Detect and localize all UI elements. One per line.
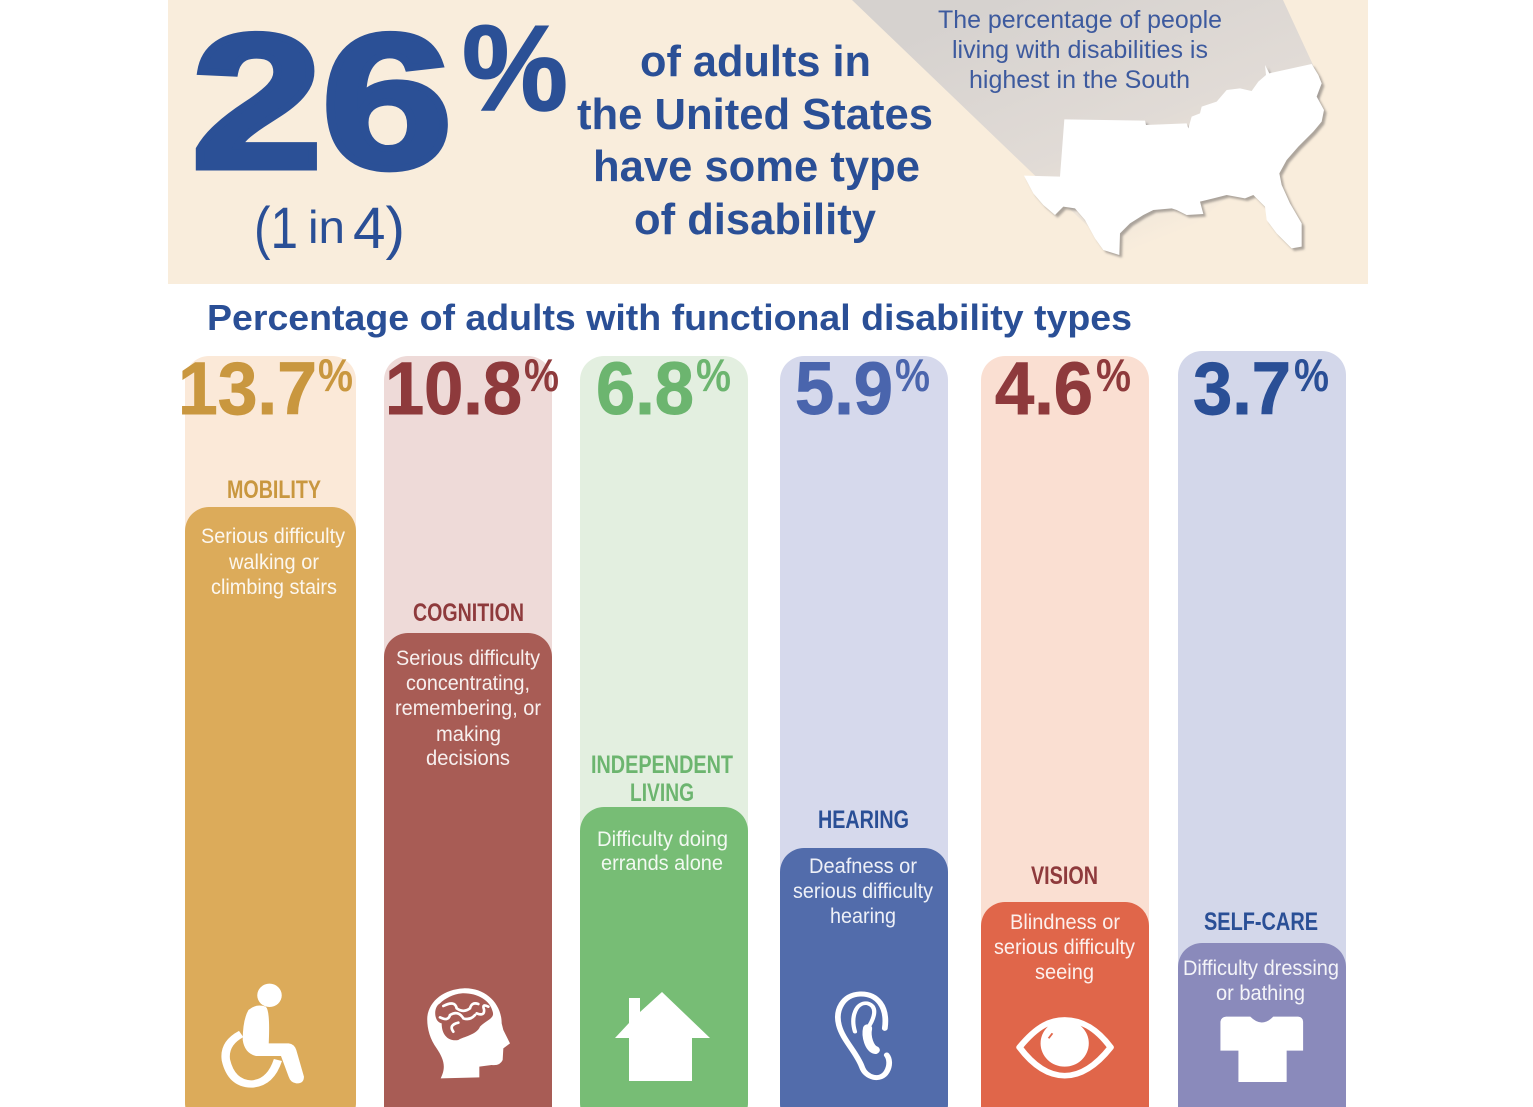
headline text: the United States xyxy=(577,90,933,139)
panel: hearing column xyxy=(780,347,948,1107)
hearing description: hearing xyxy=(830,904,896,928)
panel: headline banner xyxy=(168,0,1368,284)
1 in 4 note: in xyxy=(308,201,345,253)
section heading: Percentage of adults with functional disability types xyxy=(207,297,1132,338)
self-care description: Difficulty dressing xyxy=(1183,956,1339,980)
vision description: serious difficulty xyxy=(994,935,1135,959)
independent living description: Difficulty doing xyxy=(597,827,728,851)
mobility percentage: 13.7 xyxy=(178,347,317,430)
cognition label: COGNITION xyxy=(413,599,524,627)
headline text: of disability xyxy=(634,195,877,244)
independent living percentage: % xyxy=(696,349,731,401)
headline text xyxy=(577,37,933,244)
hearing label: HEARING xyxy=(818,806,909,834)
mobility description: walking or xyxy=(228,550,319,574)
hearing percentage: 5.9 xyxy=(795,347,893,430)
panel: independent living column xyxy=(580,347,748,1107)
vision description: seeing xyxy=(1035,960,1094,984)
mobility description: climbing stairs xyxy=(211,575,337,599)
cognition description: concentrating, xyxy=(406,671,530,695)
hearing percentage: % xyxy=(895,349,930,401)
mobility label: MOBILITY xyxy=(227,476,321,504)
vision label: VISION xyxy=(1031,862,1098,890)
big statistic 26%: % xyxy=(462,0,568,136)
independent living percentage: 6.8 xyxy=(596,347,694,430)
cognition percentage: % xyxy=(524,349,559,401)
icon: shirt xyxy=(1220,1017,1303,1082)
panel: mobility column xyxy=(178,347,356,1107)
big statistic 26%: 26 xyxy=(192,0,452,208)
independent living description: errands alone xyxy=(601,851,723,875)
map: southern United States xyxy=(1024,64,1327,258)
self-care percentage: 3.7 xyxy=(1193,347,1291,430)
hearing description xyxy=(793,854,933,928)
hearing description: serious difficulty xyxy=(793,879,933,903)
South callout text: highest in the South xyxy=(969,66,1190,94)
vision description: Blindness or xyxy=(1010,910,1120,934)
big statistic 26% xyxy=(192,0,568,208)
headline text: of adults in xyxy=(640,37,871,86)
1 in 4 note: 4) xyxy=(353,196,405,261)
hearing description: Deafness or xyxy=(809,854,917,878)
cognition description xyxy=(395,646,541,770)
mobility description: Serious difficulty xyxy=(201,524,345,548)
South callout text xyxy=(938,6,1222,94)
cognition description: decisions xyxy=(426,746,510,770)
vision description xyxy=(994,910,1135,984)
panel: self-care column xyxy=(1178,347,1346,1107)
independent living label: INDEPENDENT xyxy=(591,751,733,779)
cognition description: Serious difficulty xyxy=(396,646,540,670)
spotlight beam xyxy=(852,0,1320,262)
mobility percentage: % xyxy=(318,349,353,401)
cognition description: remembering, or xyxy=(395,696,541,720)
independent living label: LIVING xyxy=(630,779,694,807)
South callout text: living with disabilities is xyxy=(952,36,1208,64)
vision percentage: % xyxy=(1096,349,1131,401)
icon: eye xyxy=(1020,1020,1111,1076)
panel: cognition column xyxy=(384,347,559,1107)
1 in 4 note xyxy=(254,196,405,261)
self-care description xyxy=(1183,956,1339,1005)
icon: wheelchair user xyxy=(226,984,304,1084)
icon: ear xyxy=(838,994,889,1078)
icon: house xyxy=(615,992,710,1081)
self-care label: SELF-CARE xyxy=(1204,908,1318,936)
1 in 4 note: (1 xyxy=(254,196,298,261)
headline text: have some type xyxy=(593,142,920,191)
vision percentage: 4.6 xyxy=(995,347,1093,430)
independent living description xyxy=(597,827,728,875)
icon: head with brain xyxy=(427,988,510,1078)
mobility description xyxy=(201,524,345,599)
cognition percentage: 10.8 xyxy=(385,347,522,430)
independent living label xyxy=(591,751,733,807)
self-care description: or bathing xyxy=(1216,981,1305,1005)
South callout text: The percentage of people xyxy=(938,6,1222,34)
cognition description: making xyxy=(436,722,501,746)
self-care percentage: % xyxy=(1294,349,1329,401)
panel: vision column xyxy=(981,347,1149,1107)
